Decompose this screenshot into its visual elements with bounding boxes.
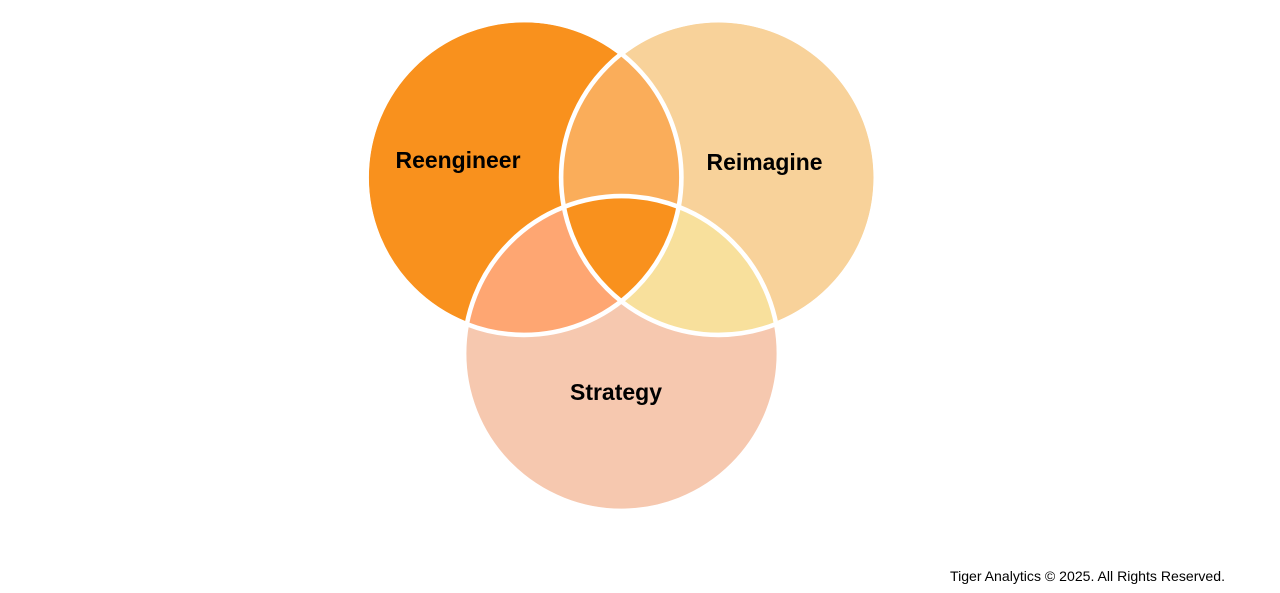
white circle outlines	[367, 20, 876, 511]
venn diagram infographic	[368, 22, 1224, 584]
circle: reimagine	[564, 22, 874, 332]
footer copyright: Tiger Analytics © 2025. All Rights Reserved.	[950, 568, 1225, 584]
circle: reengineer	[369, 22, 679, 333]
label: Strategy: Strategy	[570, 379, 662, 405]
overlap: center of all three	[566, 198, 676, 298]
overlap: reengineer and reimagine	[563, 56, 679, 204]
overlap: reimagine and strategy	[625, 210, 774, 332]
overlap: reengineer and strategy	[470, 210, 618, 332]
label: Reengineer: Reengineer	[396, 147, 521, 173]
label: Reimagine: Reimagine	[706, 149, 822, 175]
circle: strategy	[466, 198, 777, 509]
